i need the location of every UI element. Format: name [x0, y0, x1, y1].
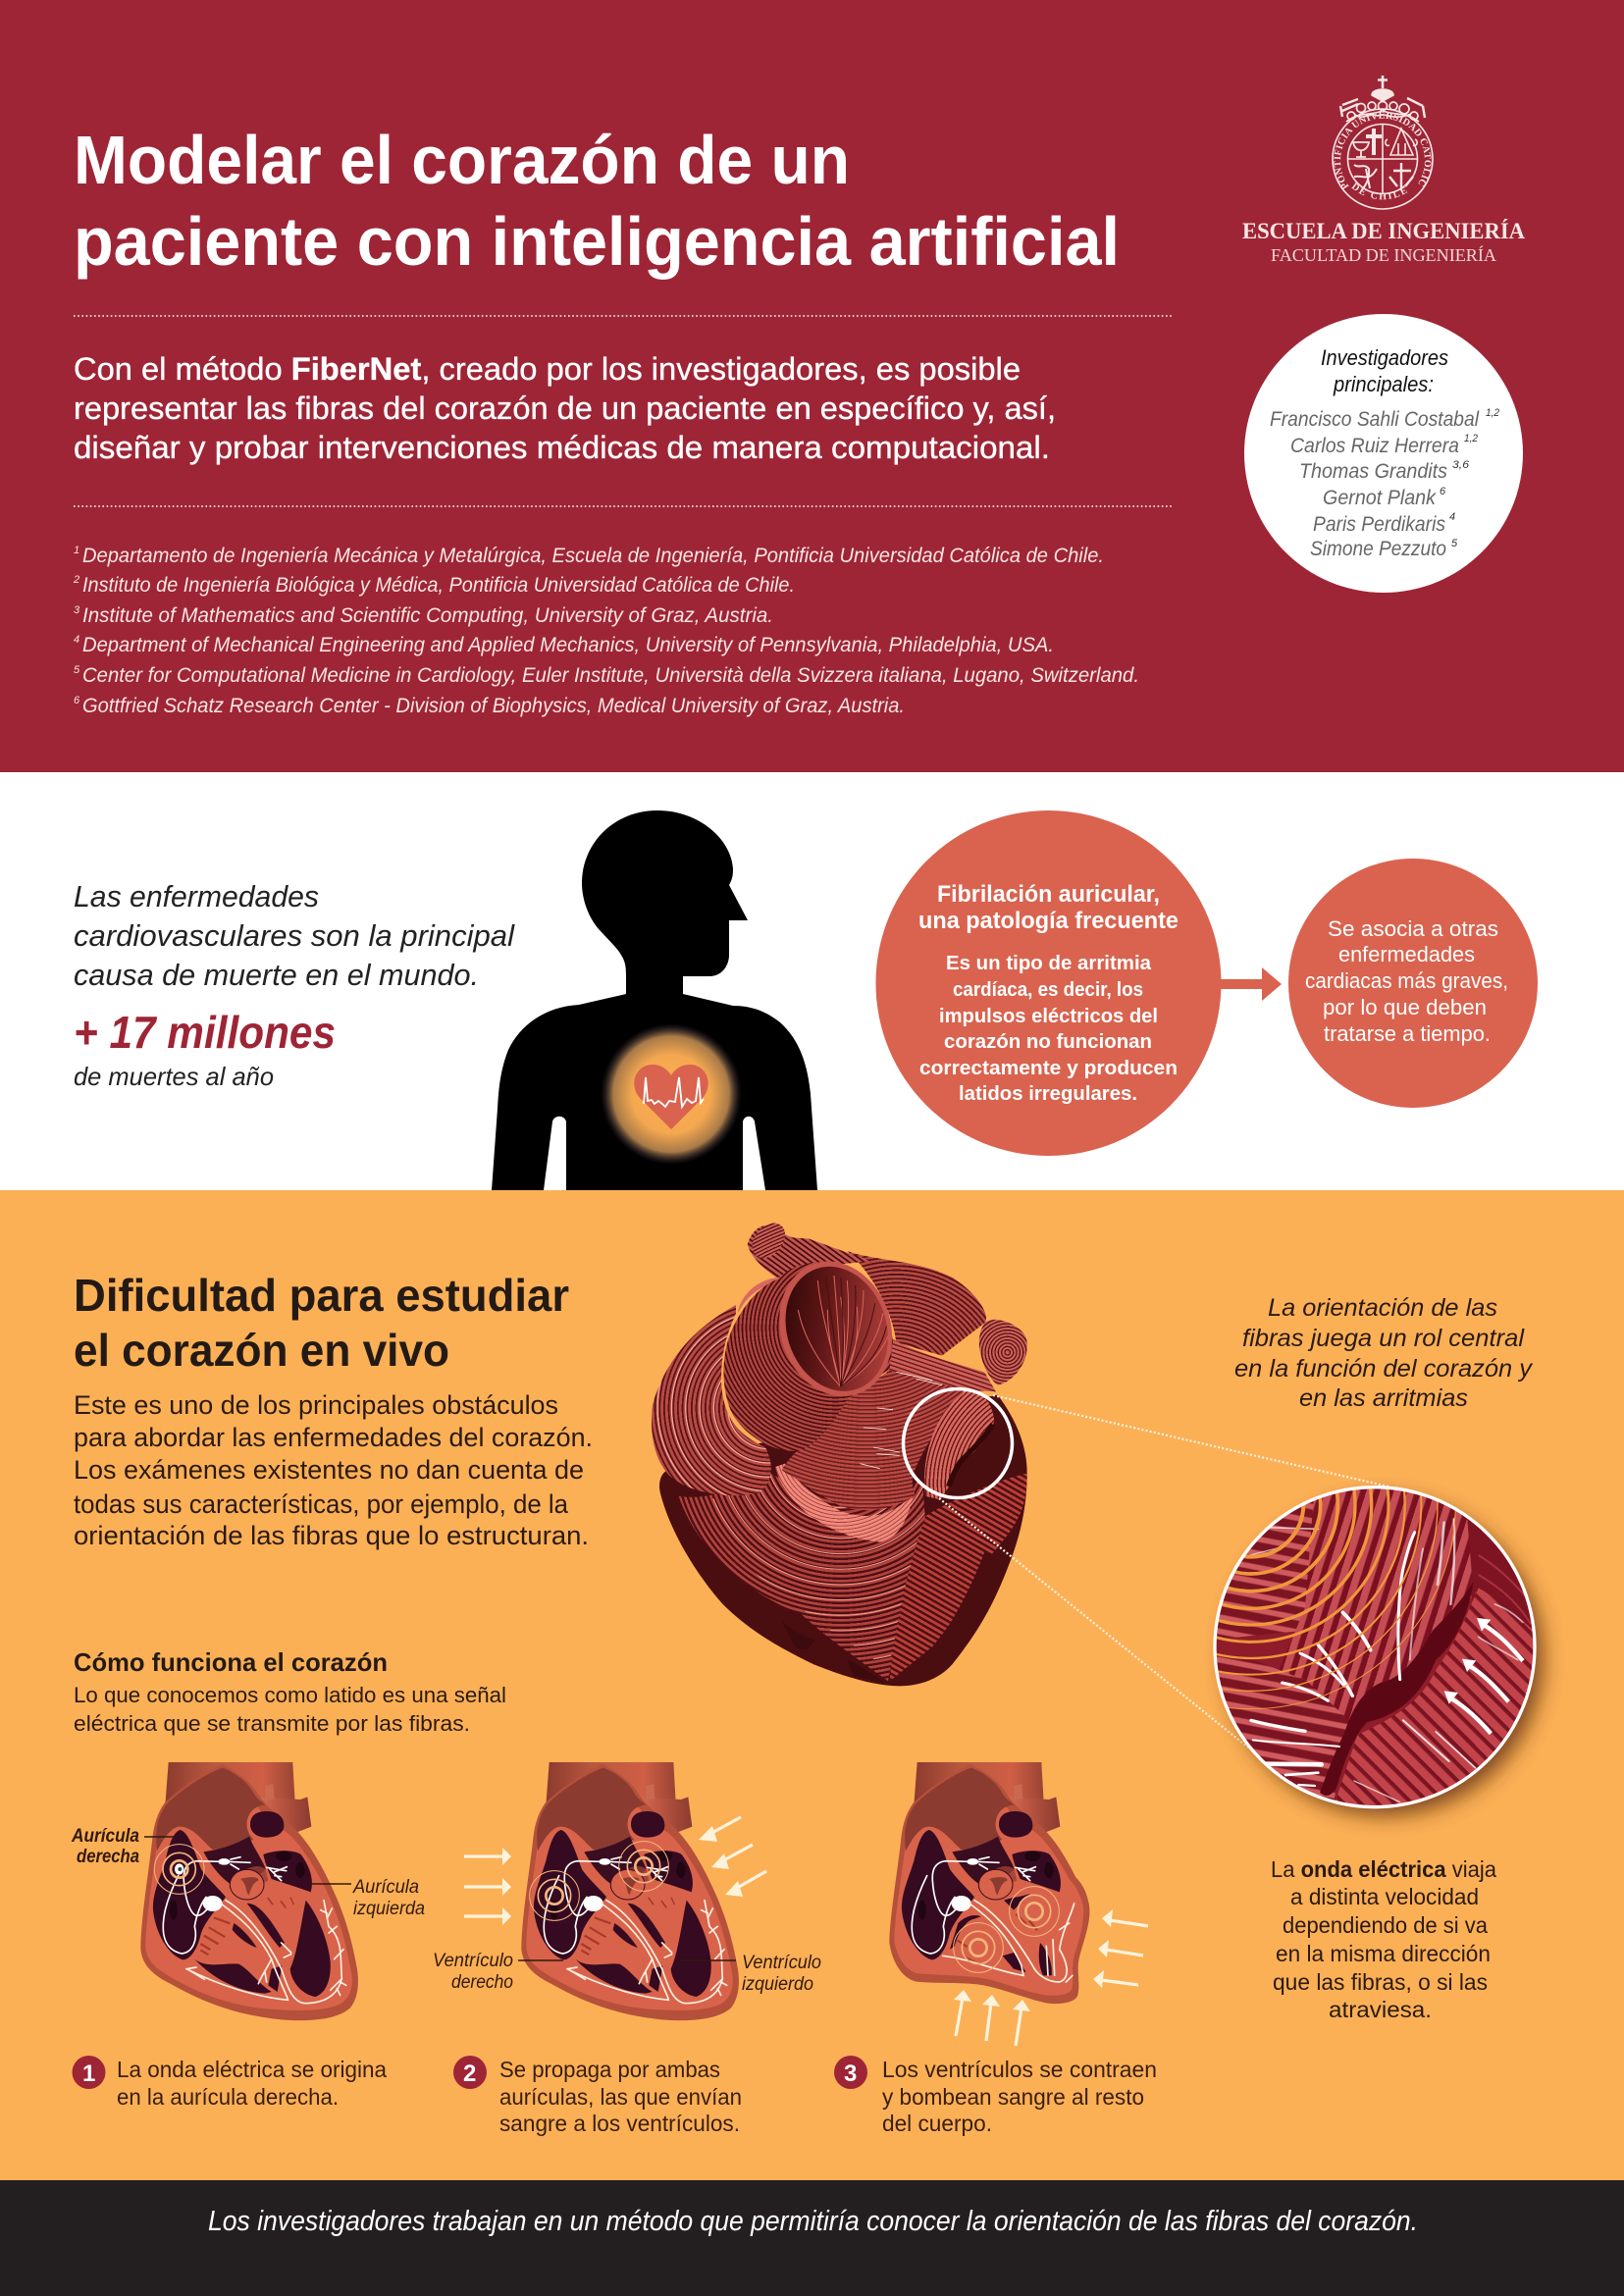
illustration: heart step 2 [521, 1762, 739, 2020]
panel: researchers: Gernot Plank [1323, 487, 1437, 509]
text: electric wave: a distinta velocidad [1290, 1884, 1479, 1909]
heading: Dificultad para estudiar [74, 1270, 569, 1321]
step 1: en la aurícula derecha. [117, 2084, 339, 2110]
step 3 [834, 2056, 1157, 2136]
text: fibre orientation: La orientación de las [1268, 1294, 1497, 1322]
paragraph: todas sus características, por ejemplo, de la [74, 1489, 569, 1519]
statement: Las enfermedades [74, 879, 319, 913]
affiliations: Center for Computational Medicine in Cardiology, Euler Institute, Università della Svizzera italiana, Lugano, Switzerland. [82, 664, 1139, 687]
paragraph: Los exámenes existentes no dan cuenta de [74, 1455, 584, 1485]
labels: heart anatomy [71, 1826, 821, 1995]
illustration: heart step 1 [140, 1762, 358, 2020]
step 1: 1 [82, 2061, 95, 2087]
labels: heart anatomy: derecho [451, 1972, 513, 1993]
text: fibre orientation: fibras juega un rol central [1242, 1325, 1525, 1352]
affiliations [73, 545, 1139, 717]
step 2: Se propaga por ambas [499, 2057, 720, 2082]
title [74, 122, 1120, 280]
logo text: FACULTAD DE INGENIERÍA [1271, 244, 1496, 265]
text: electric wave: que las fibras, o si las [1273, 1969, 1488, 1995]
icon: glowing heart [601, 1023, 742, 1165]
subheading: how the heart works: Cómo funciona el corazón [74, 1647, 388, 1677]
panel: orange section [0, 1190, 1624, 2180]
callout: atrial fibrillation: corazón no funcionan [944, 1031, 1152, 1053]
text: fibre orientation: en las arritmias [1299, 1384, 1468, 1412]
logo: university seal: DE CHILE [1351, 183, 1407, 200]
panel: researchers: Investigadores [1321, 345, 1448, 370]
labels: heart anatomy: Ventrículo [433, 1951, 513, 1971]
panel: header [0, 0, 1624, 772]
panel: researchers: Paris Perdikaris [1313, 513, 1445, 536]
panel: researchers: 4 [1449, 511, 1455, 523]
affiliations: Departamento de Ingeniería Mecánica y Metalúrgica, Escuela de Ingeniería, Pontificia Universidad Católica de Chile. [82, 545, 1104, 567]
logo text: ESCUELA DE INGENIERÍA [1242, 219, 1525, 243]
step 2: aurículas, las que envían [499, 2084, 742, 2110]
callout: atrial fibrillation: Fibrilación auricular, [937, 881, 1160, 908]
statement: cardiovasculares son la principal [74, 918, 515, 953]
paragraph: para abordar las enfermedades del corazón. [74, 1423, 593, 1452]
panel: researchers: Thomas Grandits [1299, 460, 1447, 483]
callout: associated diseases: Se asocia a otras [1328, 916, 1498, 941]
labels: heart anatomy: Ventrículo [742, 1953, 821, 1973]
intro text: diseñar y probar intervenciones médicas de manera computacional. [74, 430, 1050, 465]
step 2 [453, 2056, 742, 2136]
affiliations: Instituto de Ingeniería Biológica y Médica, Pontificia Universidad Católica de Chile. [82, 574, 795, 597]
panel: researchers: 6 [1440, 486, 1446, 497]
affiliations: 4 [74, 634, 79, 646]
icon: human silhouette [492, 810, 817, 1190]
callout: atrial fibrillation: impulsos eléctricos del [939, 1006, 1158, 1027]
illustration: heart step 3 [889, 1762, 1089, 2004]
panel: researchers [1244, 314, 1523, 593]
title: paciente con inteligencia artificial [74, 203, 1120, 280]
paragraph: orientación de las fibras que lo estructuran. [74, 1521, 589, 1550]
step 1 [73, 2056, 387, 2110]
labels: heart anatomy: Aurícula [71, 1826, 139, 1847]
callout: atrial fibrillation: una patología frecuente [918, 908, 1179, 934]
affiliations: Gottfried Schatz Research Center - Division of Biophysics, Medical University of Graz, Austria. [82, 695, 905, 717]
callout: associated diseases: tratarse a tiempo. [1324, 1021, 1491, 1046]
labels: heart anatomy: derecha [77, 1847, 139, 1867]
panel: researchers: Francisco Sahli Costabal [1270, 408, 1480, 431]
text: electric wave: dependiendo de si va [1283, 1912, 1488, 1938]
statistic: + 17 millones [74, 1007, 336, 1058]
affiliations: 5 [74, 664, 80, 676]
callout: atrial fibrillation: correctamente y producen [919, 1058, 1178, 1079]
detail circle ring on heart [903, 1389, 1013, 1497]
intro text: representar las fibras del corazón de un paciente en específico y, así, [74, 391, 1056, 426]
labels: heart anatomy: izquierda [353, 1899, 425, 1919]
text: electric wave: atraviesa. [1329, 1997, 1432, 2022]
affiliations: Institute of Mathematics and Scientific Computing, University of Graz, Austria. [82, 604, 773, 627]
callout: atrial fibrillation: Es un tipo de arritmia [946, 953, 1152, 974]
paragraph [74, 1390, 593, 1550]
step 3: del cuerpo. [882, 2111, 992, 2136]
text: fibre orientation [1234, 1294, 1534, 1412]
connector lines [939, 1395, 1388, 1751]
affiliations: 1 [74, 545, 79, 556]
statistic: de muertes al año [74, 1062, 274, 1091]
arrow [1220, 967, 1282, 1001]
illustration: magnified fibres [1211, 1483, 1558, 1831]
callout: associated diseases [1288, 859, 1538, 1108]
intro text: Con el método FiberNet, creado por los investigadores, es posible [74, 351, 1021, 387]
callout: atrial fibrillation: cardíaca, es decir, los [953, 979, 1143, 1001]
step 2: sangre a los ventrículos. [499, 2111, 740, 2136]
logo: university seal [1332, 76, 1434, 210]
footer band [0, 2180, 1624, 2296]
step 1: La onda eléctrica se origina [117, 2057, 387, 2082]
title: Modelar el corazón de un [74, 122, 850, 198]
panel: researchers: 5 [1451, 538, 1458, 549]
step 3: Los ventrículos se contraen [882, 2057, 1157, 2082]
step 3: 3 [844, 2061, 857, 2087]
affiliations: Department of Mechanical Engineering and Applied Mechanics, University of Pennsylvania, Philadelphia, USA. [82, 634, 1054, 656]
panel: researchers: Simone Pezzuto [1310, 538, 1446, 560]
text: fibre orientation: en la función del corazón y [1234, 1355, 1534, 1383]
intro text [74, 351, 1056, 465]
subheading: how the heart works: eléctrica que se transmite por las fibras. [74, 1711, 470, 1736]
heading [74, 1270, 569, 1376]
labels: heart anatomy: izquierdo [742, 1974, 813, 1995]
affiliations: 6 [74, 695, 80, 706]
logo text [1242, 219, 1525, 265]
panel: researchers: 3,6 [1452, 459, 1470, 471]
panel: researchers: Carlos Ruiz Herrera [1290, 435, 1459, 457]
labels: heart anatomy: Aurícula [352, 1877, 419, 1898]
affiliations: 3 [74, 604, 80, 616]
arrows: step 3 [954, 1909, 1148, 2046]
statement: causa de muerte en el mundo. [74, 958, 479, 992]
arrows: step 2 [464, 1817, 766, 1925]
callout: associated diseases: cardiacas más graves, [1305, 968, 1508, 993]
step 2: 2 [463, 2061, 476, 2087]
panel: researchers: 1,2 [1486, 407, 1499, 419]
statistic [74, 1007, 336, 1091]
step 3: y bombean sangre al resto [882, 2084, 1144, 2110]
callout: atrial fibrillation: latidos irregulares. [959, 1083, 1137, 1105]
text: electric wave: en la misma dirección [1276, 1941, 1491, 1966]
paragraph: Este es uno de los principales obstáculos [74, 1390, 558, 1420]
footer band: Los investigadores trabajan en un método que permitiría conocer la orientación de las fibras del corazón. [208, 2206, 1418, 2237]
callout: associated diseases: enfermedades [1338, 942, 1475, 966]
text: electric wave [1271, 1856, 1496, 2022]
callout: atrial fibrillation [875, 810, 1221, 1156]
fibre direction arrows [1444, 1618, 1523, 1734]
panel: researchers: principales: [1333, 372, 1434, 396]
illustration: anatomical heart [652, 1217, 1027, 1686]
affiliations: 2 [73, 574, 79, 586]
panel: white statistics band [0, 772, 1624, 1190]
panel: researchers: 1,2 [1464, 433, 1478, 444]
statement [74, 879, 515, 992]
subheading: how the heart works: Lo que conocemos como latido es una señal [74, 1683, 506, 1707]
callout: associated diseases: por lo que deben [1323, 995, 1487, 1019]
text: electric wave: La onda eléctrica viaja [1271, 1856, 1496, 1882]
heading: el corazón en vivo [74, 1325, 449, 1376]
subheading: how the heart works [74, 1647, 506, 1736]
